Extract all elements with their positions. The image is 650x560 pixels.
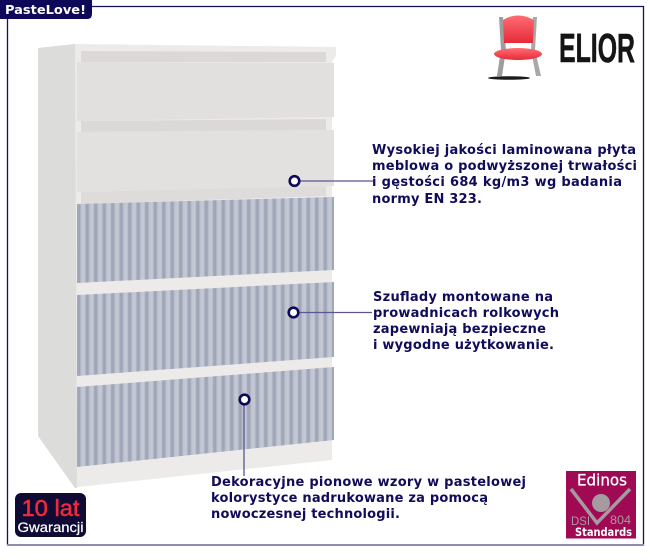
callout 1: laminated board: [290, 143, 642, 207]
brand badge: PasteLove: PasteLove!: [5, 3, 86, 17]
text 1: normy EN 323.: [372, 192, 482, 207]
drawer recess 2: [81, 119, 326, 132]
text 3: Dekoracyjne pionowe wzory w pastelowej: [211, 475, 526, 490]
badge: 10 year warranty: Gwarancji: [18, 520, 84, 535]
text 2: Szuflady montowane na: [373, 290, 553, 305]
text 3: kolorystyce nadrukowane za pomocą: [211, 491, 488, 506]
badge: 10 year warranty: 10 lat: [22, 495, 80, 521]
striped drawer 4: [77, 282, 334, 376]
text 1: meblowa o podwyższonej trwałości: [372, 159, 637, 174]
dresser: [38, 44, 336, 488]
text 2: prowadnicach rolkowych: [373, 306, 559, 321]
marker 3: [240, 395, 249, 476]
text 1: Wysokiej jakości laminowana płyta: [372, 143, 636, 158]
badge: Edinos Standards: Standards: [575, 525, 632, 539]
marker 2: [289, 308, 372, 317]
text 3: nowoczesnej technologii.: [211, 507, 400, 522]
icon: red chair: [488, 16, 542, 80]
badge: Edinos Standards: DSI: [571, 514, 590, 528]
badge: 10 year warranty: [15, 493, 86, 537]
callout 3: decorative print: [211, 395, 531, 522]
callout 2: drawer runners: [289, 290, 564, 353]
text 2: zapewniają bezpieczne: [373, 322, 546, 337]
drawer 1: [77, 62, 334, 121]
drawer recess 1: [81, 51, 326, 62]
badge: Edinos Standards: 804: [610, 513, 631, 527]
drawer recess 3: [81, 186, 326, 204]
marker 1: [290, 176, 373, 186]
badge: Edinos Standards: Edinos: [577, 470, 627, 490]
striped drawer 3: [77, 197, 334, 283]
text 1: i gęstości 684 kg/m3 wg badania: [372, 175, 622, 190]
text 2: i wygodne użytkowanie.: [373, 338, 554, 353]
dresser body: [38, 44, 336, 488]
brand badge: PasteLove: [0, 0, 92, 19]
drawer 2: [77, 130, 334, 192]
striped drawer 5: [77, 367, 334, 467]
badge: Edinos Standards: [566, 470, 636, 539]
dresser side panel: [38, 44, 77, 488]
